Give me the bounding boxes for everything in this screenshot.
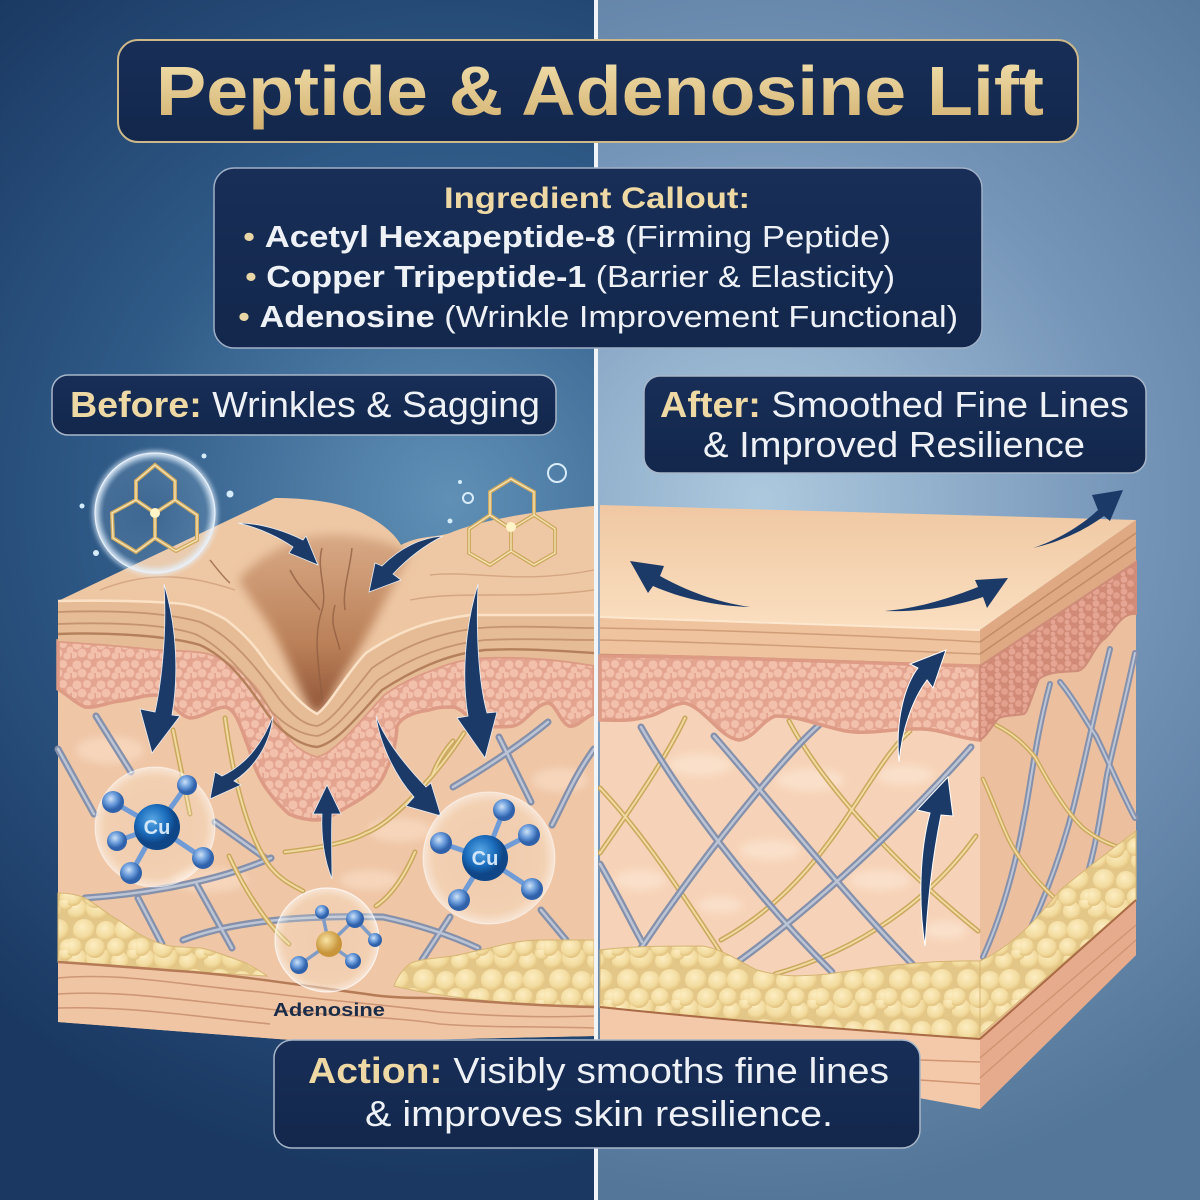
fat layer front xyxy=(600,946,980,1039)
title: Peptide & Adenosine Lift xyxy=(156,52,1044,130)
top surface xyxy=(600,505,1136,630)
collagen fibers xyxy=(58,716,594,960)
panel: action: Action: Visibly smooths fine lines xyxy=(308,1050,889,1091)
ingredient 3: • Adenosine (Wrinkle Improvement Functional) xyxy=(238,299,958,334)
blue collagen lattice xyxy=(600,725,971,972)
gold lattice xyxy=(600,718,978,974)
epidermis band side xyxy=(980,520,1136,666)
arrow: left downward xyxy=(140,584,180,753)
wrinkle creases xyxy=(210,548,352,700)
arrow: upward through epidermis xyxy=(898,650,946,762)
epidermis strata band xyxy=(58,601,594,756)
arrows: after panel xyxy=(630,490,1123,946)
icon: peptide hexagons right xyxy=(469,479,555,565)
icon: adenosine molecule xyxy=(275,888,382,992)
panel: before skin cross-section xyxy=(58,498,594,1042)
label: after: & Improved Resilience xyxy=(703,424,1085,465)
side fibers xyxy=(983,649,1135,957)
dermis base xyxy=(58,601,594,1042)
fat layer side xyxy=(980,831,1136,1035)
lower dermis bands xyxy=(58,962,594,1042)
epidermis band front xyxy=(600,617,980,666)
pink cell layer side xyxy=(980,562,1136,740)
divider line xyxy=(594,0,598,1200)
panel: action xyxy=(274,1040,920,1148)
arrow: upward through dermis xyxy=(917,777,953,946)
front face xyxy=(600,617,980,1109)
arrow: right downward xyxy=(457,584,497,758)
icon: copper molecule right xyxy=(423,792,555,924)
label: after xyxy=(644,376,1146,473)
front edge highlight xyxy=(58,601,594,714)
label: after: After: Smoothed Fine Lines xyxy=(660,384,1129,425)
arrow: up from adenosine xyxy=(313,785,341,879)
icon: copper molecule left xyxy=(95,767,215,887)
panel: after skin block xyxy=(600,505,1136,1109)
ingredient 1: • Acetyl Hexapeptide-8 (Firming Peptide) xyxy=(243,219,891,254)
arrow: toward right copper xyxy=(376,716,441,816)
label: adenosine: Adenosine xyxy=(273,1000,385,1020)
background: right half xyxy=(596,0,1200,1200)
icon: peptide bubble left xyxy=(95,453,215,573)
skin surface xyxy=(58,498,594,714)
callout heading: Ingredient Callout: xyxy=(444,182,750,215)
arrow: into valley from right xyxy=(369,536,443,592)
arrow: surface lift left xyxy=(630,561,750,607)
icon: copper molecule left: Cu xyxy=(144,817,170,839)
arrow: toward left copper xyxy=(210,716,273,799)
bubbles and sparkles xyxy=(80,454,566,556)
fat layer right xyxy=(394,940,594,1008)
label: before xyxy=(52,375,556,435)
arrows: before panel xyxy=(140,523,497,879)
panel: action: & improves skin resilience. xyxy=(365,1093,833,1134)
title xyxy=(118,40,1078,142)
arrow: surface lift right xyxy=(885,578,1008,611)
arrow: into valley from left xyxy=(238,523,318,565)
pink cell layer front xyxy=(600,656,980,740)
pink cell layer xyxy=(58,641,594,820)
wrinkle valley xyxy=(239,535,408,714)
arrow: surface lift far right xyxy=(1033,490,1123,548)
icon: copper molecule right: Cu xyxy=(472,848,498,870)
epidermis strata lines xyxy=(58,611,594,747)
surface highlight lines xyxy=(100,570,594,600)
dermis texture xyxy=(76,736,588,892)
dermis texture xyxy=(614,754,967,939)
side face xyxy=(980,520,1136,1109)
gold fibers xyxy=(173,718,464,944)
ingredient 2: • Copper Tripeptide-1 (Barrier & Elasticity) xyxy=(245,259,895,294)
panel: ingredient callout xyxy=(214,168,982,348)
background: left half xyxy=(0,0,596,1200)
lower bands xyxy=(600,1007,980,1109)
fat layer left xyxy=(58,893,267,976)
label: before: Before: Wrinkles & Sagging xyxy=(70,384,540,425)
